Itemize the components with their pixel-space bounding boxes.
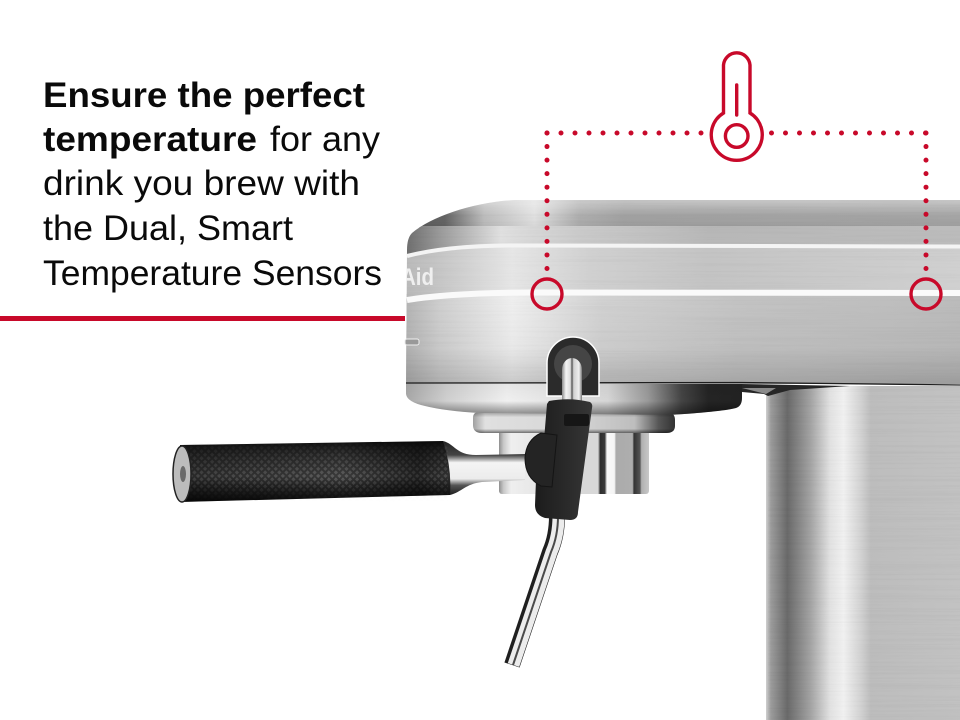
portafilter handle [173,441,525,502]
upper white trim line [407,245,960,256]
port chrome pipe [562,358,582,404]
heading line 2 regular: for any [270,120,381,159]
right sensor ring [911,279,941,309]
group disc [473,412,675,433]
middle band [400,247,960,302]
icon: thermometer [711,53,762,160]
steam port [547,337,599,404]
knurled black grip [180,441,450,502]
lower white trim line [407,292,960,300]
metal end cap [173,446,191,502]
heading line 1: Ensure the perfect [43,76,365,115]
brushed steel texture [400,200,960,384]
chrome neck [443,441,525,495]
heading line 5: Temperature Sensors [43,254,382,293]
column top shadow [742,384,850,396]
heading line 4: the Dual, Smart [43,209,293,248]
lower body [406,294,408,380]
dotted connector [547,130,926,136]
upper trim band [400,226,960,256]
sleeve button [564,414,589,426]
pivot knob [525,433,557,487]
brand badge: Aid [401,264,434,291]
heading text block [43,76,382,293]
heading line 2 bold: temperature [43,120,257,159]
temperature callout [532,53,941,309]
small switch [405,339,419,345]
top shell band [400,198,960,228]
steam wand [512,399,592,665]
basket cylinder [499,430,649,494]
black wand sleeve [535,399,592,520]
port housing [547,337,599,396]
wand tube [512,516,557,665]
red underline rule [0,316,405,321]
seam line [406,382,960,385]
left sensor ring [532,279,562,309]
group head and portafilter basket [473,412,675,494]
column of machine [742,384,960,720]
heading line 3: drink you brew with [43,164,360,203]
port inner disc [554,345,592,383]
lower lip [406,380,742,415]
machine head [400,198,960,415]
